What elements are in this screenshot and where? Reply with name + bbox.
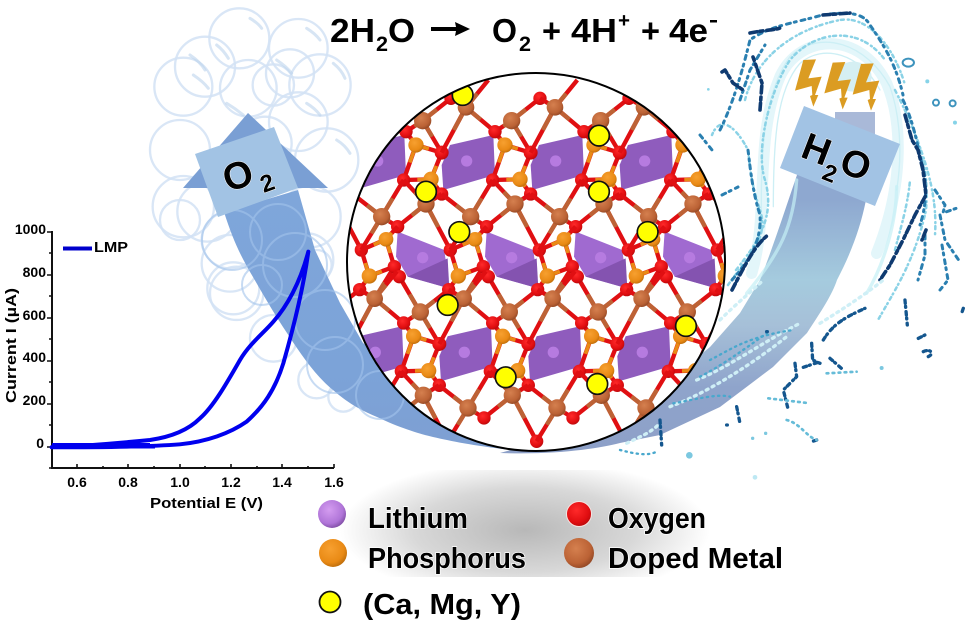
label box: O2: O: [217, 151, 259, 201]
label box: O2: 2: [257, 169, 278, 199]
legend: doped metal: [564, 538, 783, 575]
water splash swirl: [707, 42, 957, 293]
legend: Ca, Mg, Y dopant: (Ca, Mg, Y): [363, 589, 521, 621]
arrow head: [183, 113, 328, 188]
title: reaction equation: [330, 10, 717, 56]
legend: oxygen: Oxygen: [608, 503, 706, 535]
label box: H2O: [780, 106, 900, 206]
x axis tick labels: 1.2: [221, 474, 241, 490]
label box: H2O: 2: [818, 159, 841, 189]
curved blue arrow: right water arm: [500, 172, 866, 453]
title: reaction equation: 4H: [571, 12, 617, 49]
axes: [47, 231, 334, 468]
title: reaction equation: O: [492, 12, 517, 49]
legend: [318, 500, 783, 621]
legend: phosphorus: Phosphorus: [368, 543, 526, 575]
y axis tick labels: 200: [23, 392, 46, 408]
legend: lithium: Lithium: [368, 503, 468, 535]
title: reaction equation: +: [641, 12, 660, 49]
y axis title: Current I (µA): [3, 288, 20, 403]
label box: O2: [195, 127, 298, 217]
label box: H2O: H: [796, 126, 837, 175]
legend: doped metal: Doped Metal: [608, 543, 783, 575]
dopant sites (Ca, Mg, Y): [416, 85, 696, 394]
dark patch behind H2O label: [835, 112, 875, 145]
x axis tick labels: 0.6: [67, 474, 87, 490]
translucent bubbles over the shaft: [202, 204, 404, 419]
x axis tick labels: 1.0: [170, 474, 190, 490]
chart: cyclic voltammogram: [3, 221, 344, 512]
legend: lithium: [318, 500, 468, 535]
x axis tick labels: 1.6: [324, 474, 344, 490]
CV curve: [52, 252, 308, 447]
legend shadow: [356, 470, 694, 577]
chart legend: [63, 239, 128, 256]
water splash strands: [700, 13, 960, 320]
x axis tick labels: 1.4: [272, 474, 292, 490]
legend: oxygen: [566, 502, 706, 535]
curved blue arrow: left shaft: [224, 190, 530, 452]
title: reaction equation: 2H: [330, 12, 375, 49]
lower splash and droplets: [620, 280, 963, 488]
y axis tick labels: 1000: [15, 221, 46, 237]
y axis tick labels: [15, 221, 46, 451]
legend: phosphorus: [319, 539, 526, 575]
icon: lightning bolts: [795, 59, 879, 111]
y axis tick labels: 800: [23, 264, 46, 280]
crystal lattice circle: [346, 72, 726, 452]
x axis title: Potential E (V): [150, 495, 263, 512]
chart legend: LMP: [94, 239, 128, 256]
y axis tick labels: 600: [23, 307, 46, 323]
y axis tick labels: 400: [23, 349, 46, 365]
title: reaction equation: 2: [519, 33, 531, 56]
bubbles beside the chart: [160, 200, 420, 530]
lattice structure: [261, 80, 814, 448]
title: reaction equation: O: [388, 12, 415, 49]
title: reaction equation: 2: [376, 33, 388, 56]
label box: H2O: O: [834, 140, 877, 190]
y axis tick labels: 0: [36, 435, 44, 451]
title: reaction equation: +: [542, 12, 561, 49]
title: reaction equation: +: [618, 10, 630, 32]
x axis tick labels: [67, 474, 344, 490]
x axis tick labels: 0.8: [118, 474, 138, 490]
bubbles rising from the arrow: [150, 8, 358, 320]
title: reaction equation: 4e: [669, 12, 708, 49]
